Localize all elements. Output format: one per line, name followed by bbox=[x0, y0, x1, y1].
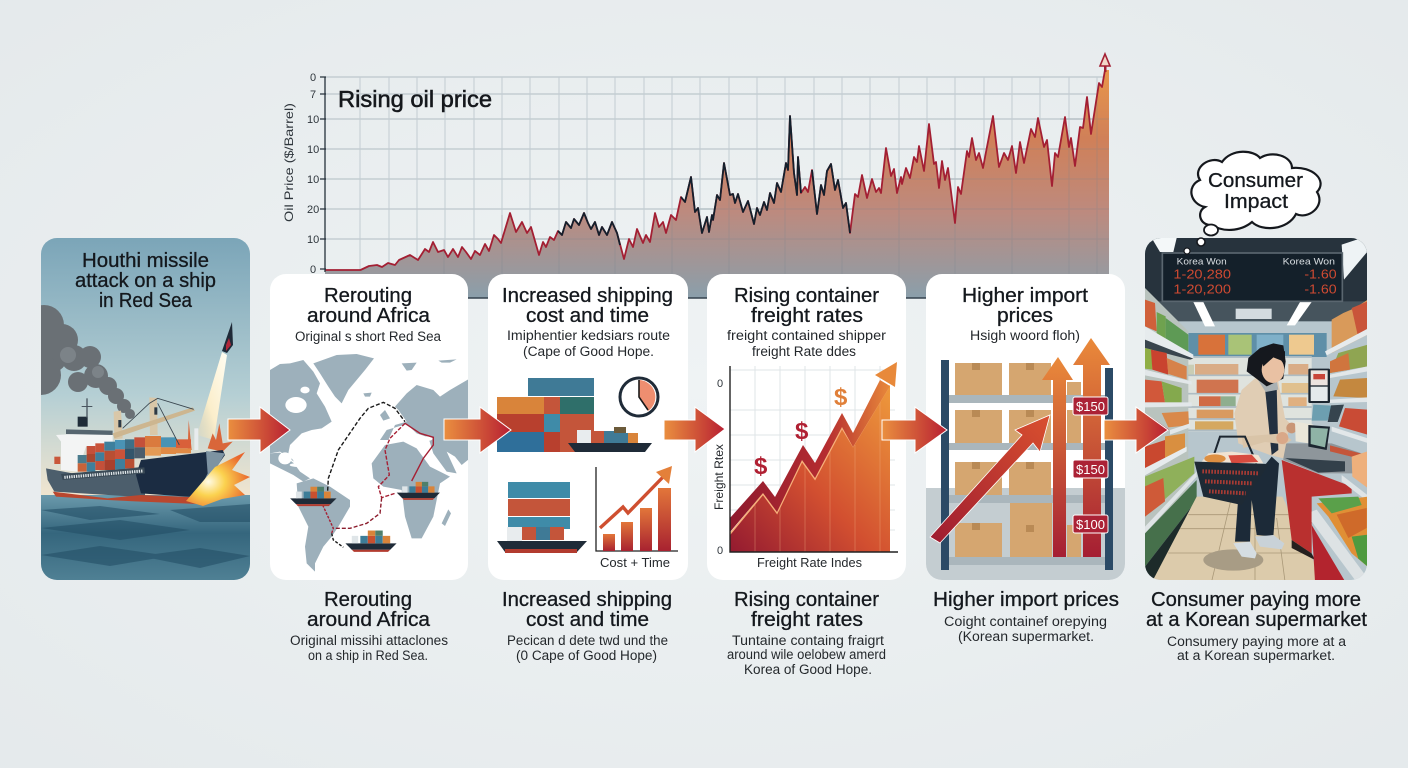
smoke bbox=[41, 305, 135, 419]
thought bubble: consumer impact bbox=[1184, 152, 1321, 254]
warehouse rack bbox=[926, 360, 1125, 580]
price board: Korea Won bbox=[1177, 257, 1227, 267]
price tags: $150 bbox=[1076, 399, 1105, 414]
arrow 5 bbox=[1104, 407, 1168, 453]
arrow 1 bbox=[228, 407, 290, 453]
price board bbox=[1162, 253, 1342, 301]
y axis numbers: 7 bbox=[310, 89, 316, 101]
caption: import prices: Higher import prices bbox=[933, 589, 1119, 611]
arrows up bbox=[930, 338, 1110, 557]
caption: freight rates: around wile oelobew amerd bbox=[727, 647, 886, 662]
panel title: in Red Sea bbox=[99, 290, 193, 312]
heading: freight Rate ddes bbox=[752, 344, 856, 359]
caption: freight rates bbox=[727, 589, 886, 677]
explosion bbox=[186, 452, 250, 506]
left shelves bbox=[1145, 288, 1197, 581]
panel: higher import prices bbox=[926, 274, 1125, 580]
oil price line bbox=[325, 70, 1105, 270]
price board: 1-20,280 bbox=[1173, 267, 1231, 282]
panel title: attack on a ship bbox=[75, 270, 216, 292]
caption: rerouting: around Africa bbox=[307, 609, 431, 631]
right shelves bbox=[1308, 300, 1368, 501]
lower containers and ship bbox=[497, 482, 587, 553]
panel title: Houthi missile bbox=[82, 250, 209, 272]
panel: freight rates bbox=[707, 274, 906, 580]
heading: Rerouting bbox=[324, 285, 412, 307]
end arrowhead bbox=[1100, 54, 1110, 72]
caption: shipping cost: (0 Cape of Good Hope) bbox=[516, 648, 657, 663]
freight chart: 0 bbox=[717, 378, 723, 390]
heading bbox=[962, 285, 1088, 343]
caption: consumer: at a Korean supermarket. bbox=[1177, 648, 1335, 663]
price board: -1.60 bbox=[1304, 267, 1337, 282]
chart title: Rising oil price bbox=[338, 86, 492, 112]
axes bbox=[320, 77, 1109, 298]
y axis numbers: 20 bbox=[307, 204, 319, 216]
caption: freight rates: Rising container bbox=[734, 589, 879, 611]
heading bbox=[727, 285, 887, 359]
caption: consumer: Consumery paying more at a bbox=[1167, 634, 1346, 649]
heading: Rising container bbox=[734, 285, 879, 307]
panel: rerouting map bbox=[270, 274, 470, 580]
oil area fill bbox=[325, 70, 1109, 298]
chart: rising oil price bbox=[282, 54, 1110, 298]
arrow 3 bbox=[664, 407, 725, 452]
heading: (Cape of Good Hope. bbox=[523, 344, 654, 359]
heading: freight contained shipper bbox=[727, 328, 887, 343]
price board: 1-20,200 bbox=[1173, 282, 1231, 297]
caption: import prices: (Korean supermarket. bbox=[958, 629, 1094, 644]
arrow 4 bbox=[882, 407, 947, 453]
caption: consumer bbox=[1146, 589, 1367, 663]
heading bbox=[502, 285, 673, 359]
container stack bbox=[497, 378, 594, 452]
dark line segments bbox=[558, 116, 850, 245]
caption: rerouting: Rerouting bbox=[324, 589, 412, 611]
world map bbox=[270, 354, 470, 572]
checkout counter bbox=[1282, 443, 1368, 560]
caption: freight rates: freight rates bbox=[751, 609, 863, 631]
heading: Imiphentier kedsiars route bbox=[507, 328, 670, 343]
price board: -1.60 bbox=[1304, 282, 1337, 297]
clock icon bbox=[620, 378, 658, 416]
y axis numbers: 10 bbox=[307, 234, 319, 246]
y axis numbers: 10 bbox=[307, 174, 319, 186]
thought bubble: consumer impact: Consumer bbox=[1208, 170, 1303, 192]
heading bbox=[295, 285, 441, 344]
y axis numbers: 0 bbox=[310, 72, 316, 84]
thought bubble: consumer impact: Impact bbox=[1224, 191, 1288, 213]
missile bbox=[197, 322, 233, 440]
heading: around Africa bbox=[307, 305, 431, 327]
caption: consumer: Consumer paying more bbox=[1151, 589, 1361, 611]
heading: Higher import bbox=[962, 285, 1088, 307]
fridge with food bbox=[1312, 497, 1368, 581]
caption: freight rates: Korea of Good Hope. bbox=[744, 662, 872, 677]
mini cost chart bbox=[596, 466, 678, 551]
heading: cost and time bbox=[526, 305, 649, 327]
price tags: $100 bbox=[1076, 517, 1105, 532]
back wall and posters bbox=[1188, 333, 1327, 357]
heading: Increased shipping bbox=[502, 285, 673, 307]
tablet and items bbox=[1295, 422, 1330, 450]
caption: rerouting: on a ship in Red Sea. bbox=[308, 648, 428, 663]
caption: shipping cost: cost and time bbox=[526, 609, 649, 631]
panel: Houthi missile attack bbox=[21, 238, 250, 580]
caption: import prices: Coight containef orepying bbox=[944, 614, 1107, 629]
caption: import prices bbox=[933, 589, 1119, 644]
freight chart: $ bbox=[754, 453, 768, 480]
shopper bbox=[1233, 343, 1297, 558]
ship bbox=[568, 427, 652, 452]
freight chart bbox=[712, 362, 898, 570]
price board: Korea Won bbox=[1283, 257, 1335, 267]
price tags bbox=[1073, 397, 1108, 533]
caption: shipping cost bbox=[502, 589, 672, 663]
y axis label: Oil Price ($/Barrel) bbox=[282, 103, 296, 222]
y axis numbers: 10 bbox=[307, 114, 319, 126]
caption: consumer: at a Korean supermarket bbox=[1146, 609, 1367, 631]
price tags: $150 bbox=[1076, 462, 1105, 477]
back shelves bbox=[1187, 356, 1312, 431]
ceiling bbox=[1145, 238, 1368, 326]
y axis numbers: 10 bbox=[307, 144, 319, 156]
panel: Korean supermarket bbox=[1145, 238, 1368, 581]
freight chart: Freight Rtex bbox=[712, 444, 726, 510]
freight chart: 0 bbox=[717, 545, 723, 557]
y axis numbers bbox=[307, 72, 319, 276]
shopping basket bbox=[1194, 437, 1269, 505]
freight chart: Freight Rate Indes bbox=[757, 555, 862, 570]
chart label: Cost + Time bbox=[600, 555, 670, 570]
heading: Hsigh woord floh) bbox=[970, 328, 1080, 343]
heading: prices bbox=[997, 305, 1053, 327]
freight chart: $ bbox=[795, 418, 809, 445]
heading: freight rates bbox=[751, 305, 863, 327]
panel: shipping cost and time bbox=[488, 274, 688, 580]
heading: Original s short Red Sea bbox=[295, 329, 441, 344]
sea bbox=[41, 495, 250, 580]
caption: rerouting bbox=[290, 589, 448, 663]
caption: freight rates: Tuntaine containg fraigrt bbox=[732, 633, 884, 648]
y axis numbers: 0 bbox=[310, 264, 316, 276]
arrow 2 bbox=[444, 407, 511, 453]
caption: shipping cost: Increased shipping bbox=[502, 589, 672, 611]
caption: rerouting: Original missihi attaclones bbox=[290, 633, 448, 648]
caption: shipping cost: Pecican d dete twd und the bbox=[507, 633, 668, 648]
container ship bbox=[46, 397, 233, 504]
panel title bbox=[76, 252, 216, 308]
floor bbox=[1152, 497, 1323, 581]
freight chart: $ bbox=[834, 384, 848, 411]
